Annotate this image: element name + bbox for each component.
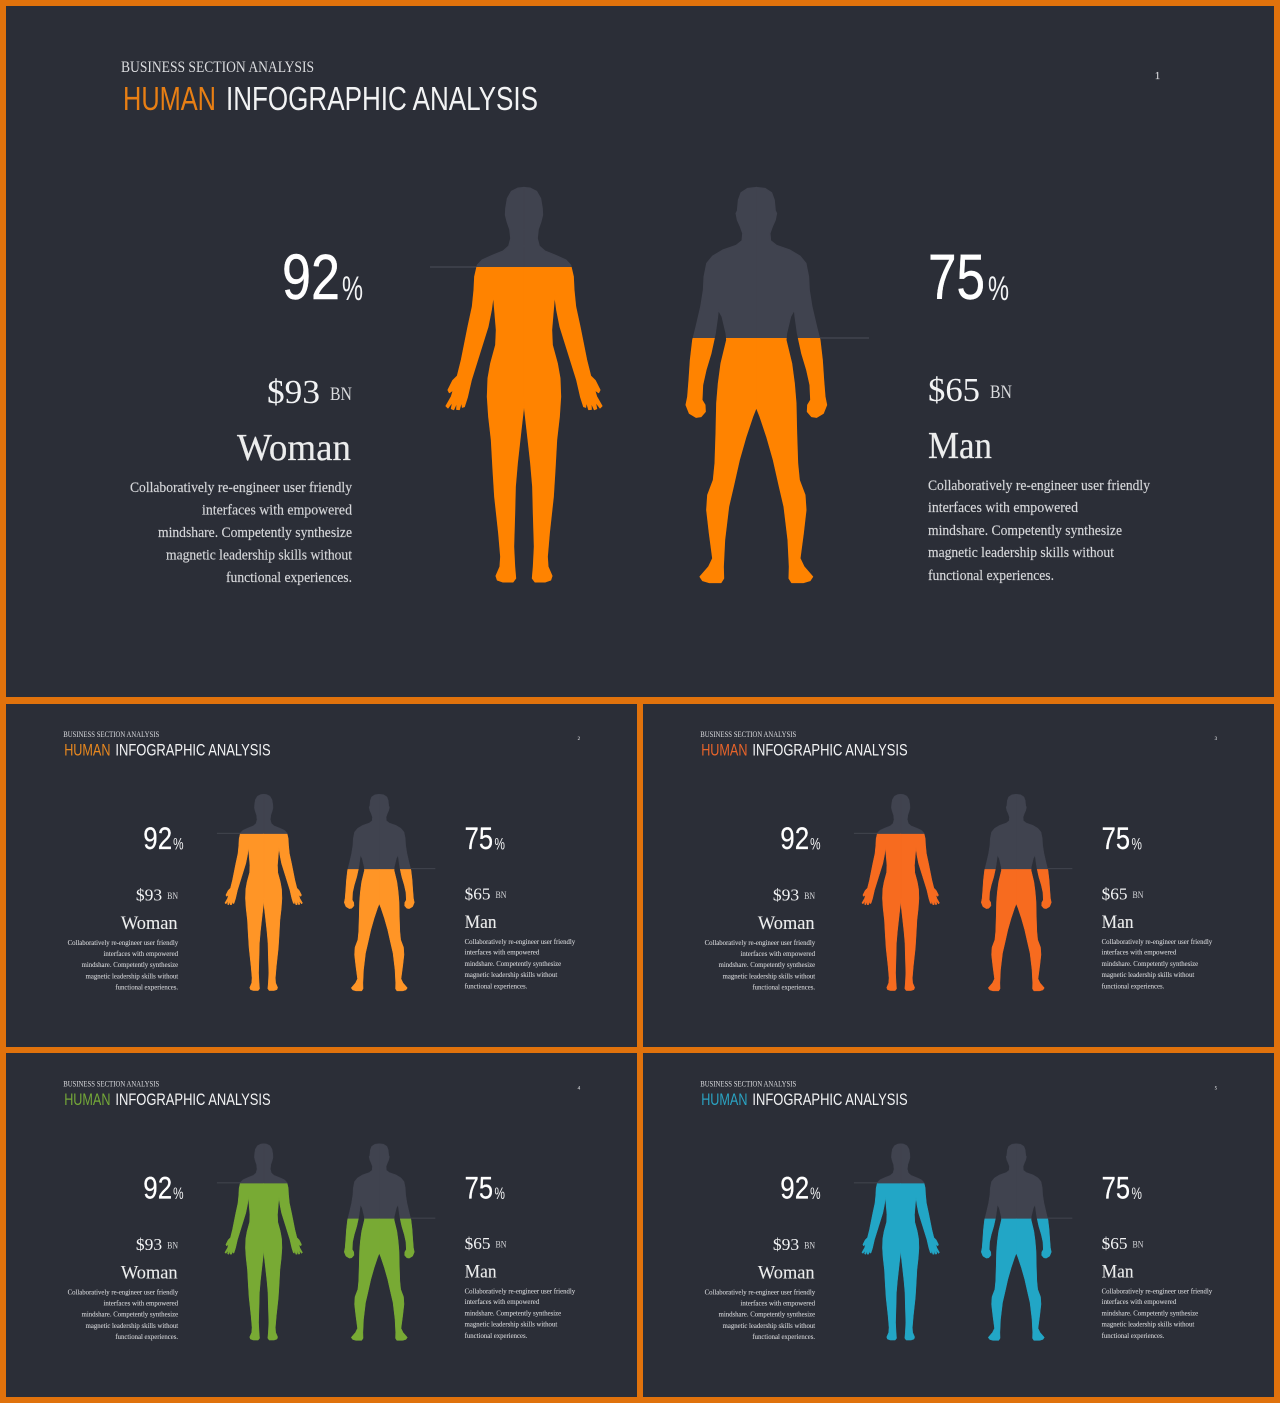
page number: 3 [1215, 737, 1218, 742]
woman description: functional experiences. [115, 1332, 178, 1341]
man description: mindshare. Competently synthesize [1102, 1309, 1199, 1318]
title: HUMAN [701, 1091, 747, 1109]
woman leader line [854, 1181, 878, 1184]
section label: BUSINESS SECTION ANALYSIS [63, 730, 159, 739]
woman heading: Woman [121, 1262, 178, 1283]
woman description: mindshare. Competently synthesize [719, 960, 816, 969]
woman value: BN [804, 1242, 815, 1252]
page number: 5 [1215, 1086, 1218, 1091]
man leader line [411, 1217, 435, 1220]
man percentage: % [495, 1184, 505, 1203]
man heading: Man [1102, 912, 1134, 933]
woman description: magnetic leadership skills without [86, 971, 179, 980]
man figure [344, 794, 414, 991]
woman leader line [430, 266, 478, 268]
title [701, 1091, 908, 1109]
man percentage: % [988, 270, 1009, 308]
man description: interfaces with empowered [928, 500, 1078, 516]
woman value: BN [330, 384, 352, 405]
man heading: Man [465, 912, 497, 933]
man leader line [411, 867, 435, 870]
man description: magnetic leadership skills without [1102, 970, 1195, 979]
man description: functional experiences. [465, 982, 527, 991]
man value: BN [496, 891, 507, 901]
title: HUMAN [64, 742, 110, 760]
man leader line [820, 338, 869, 339]
man description: Collaboratively re-engineer user friendly [928, 478, 1150, 494]
woman value: $93 [773, 885, 799, 904]
man value: $65 [465, 1234, 491, 1253]
woman description: mindshare. Competently synthesize [82, 960, 179, 969]
page number: 2 [578, 737, 581, 742]
man heading: Man [465, 1261, 497, 1282]
man percentage: 75 [465, 820, 493, 856]
title: INFOGRAPHIC ANALYSIS [752, 742, 908, 760]
man description: Collaboratively re-engineer user friendly [1102, 937, 1212, 946]
man leader line [1048, 1217, 1072, 1220]
panel: amber variant [6, 704, 637, 1047]
man description [1102, 937, 1212, 991]
woman percentage: % [342, 270, 363, 308]
man heading: Man [1102, 1261, 1134, 1282]
woman value [773, 1235, 815, 1254]
man percentage: 75 [928, 241, 985, 313]
man description: mindshare. Competently synthesize [465, 1309, 562, 1318]
woman description: mindshare. Competently synthesize [719, 1310, 816, 1319]
title: INFOGRAPHIC ANALYSIS [115, 742, 271, 760]
title [123, 80, 538, 117]
man heading: Man [928, 425, 992, 467]
woman description: magnetic leadership skills without [166, 548, 353, 564]
man description: Collaboratively re-engineer user friendly [1102, 1286, 1212, 1295]
panel: blue variant [643, 1053, 1274, 1397]
man description: magnetic leadership skills without [465, 1320, 558, 1329]
man figure [981, 794, 1051, 991]
woman description: interfaces with empowered [103, 1298, 178, 1307]
woman description [705, 938, 816, 992]
woman description: Collaboratively re-engineer user friendly [705, 938, 815, 947]
panel: red-orange variant [643, 704, 1274, 1047]
woman description [705, 1287, 816, 1341]
man value [1102, 885, 1144, 904]
title [64, 742, 271, 760]
man description: functional experiences. [1102, 1331, 1164, 1340]
woman leader line [217, 832, 241, 835]
man percentage: % [1132, 834, 1142, 853]
woman figure [446, 187, 602, 582]
woman heading: Woman [758, 1262, 815, 1283]
woman percentage: 92 [143, 820, 172, 856]
man percentage: 75 [1102, 1169, 1130, 1205]
woman figure [862, 1144, 939, 1340]
man description: mindshare. Competently synthesize [928, 523, 1122, 539]
title [64, 1091, 271, 1109]
title: HUMAN [123, 80, 216, 117]
woman heading: Woman [758, 913, 815, 934]
woman description: interfaces with empowered [740, 1298, 815, 1307]
woman value [267, 374, 352, 411]
woman description: mindshare. Competently synthesize [158, 525, 352, 541]
man description: interfaces with empowered [465, 1297, 540, 1306]
woman description: Collaboratively re-engineer user friendly [705, 1287, 815, 1296]
woman description: Collaboratively re-engineer user friendly [130, 480, 352, 496]
panel: green variant [6, 1053, 637, 1397]
section label: BUSINESS SECTION ANALYSIS [63, 1079, 159, 1088]
man description: magnetic leadership skills without [928, 545, 1115, 561]
woman leader line [217, 1181, 241, 1184]
woman percentage: 92 [143, 1169, 172, 1205]
woman description: magnetic leadership skills without [723, 971, 816, 980]
woman description: Collaboratively re-engineer user friendly [68, 1287, 178, 1296]
man description: Collaboratively re-engineer user friendly [465, 937, 575, 946]
man value: $65 [928, 372, 980, 409]
man value [928, 372, 1012, 409]
woman value [773, 885, 815, 904]
man value: $65 [465, 885, 491, 904]
title: INFOGRAPHIC ANALYSIS [115, 1091, 271, 1109]
page number: 1 [1155, 71, 1160, 82]
man description: magnetic leadership skills without [1102, 1320, 1195, 1329]
man description: mindshare. Competently synthesize [465, 959, 562, 968]
man value [465, 885, 507, 904]
section label: BUSINESS SECTION ANALYSIS [700, 1079, 796, 1088]
man description: interfaces with empowered [1102, 1297, 1177, 1306]
woman description: interfaces with empowered [740, 949, 815, 958]
man percentage: % [495, 834, 505, 853]
title: INFOGRAPHIC ANALYSIS [752, 1091, 908, 1109]
man description: functional experiences. [465, 1331, 527, 1340]
man percentage: % [1132, 1184, 1142, 1203]
woman description: magnetic leadership skills without [723, 1321, 816, 1330]
man figure [686, 187, 827, 583]
woman description: magnetic leadership skills without [86, 1321, 179, 1330]
woman value: $93 [267, 374, 320, 411]
section label: BUSINESS SECTION ANALYSIS [121, 59, 314, 76]
woman leader line [854, 832, 878, 835]
man value: BN [496, 1241, 507, 1251]
woman description [68, 938, 179, 992]
title: HUMAN [64, 1091, 110, 1109]
woman percentage: % [173, 1184, 184, 1203]
woman figure [862, 794, 939, 991]
woman heading: Woman [237, 427, 351, 469]
man figure [981, 1144, 1051, 1340]
man value [465, 1234, 507, 1253]
woman description: Collaboratively re-engineer user friendly [68, 938, 178, 947]
man description: magnetic leadership skills without [465, 970, 558, 979]
man percentage: 75 [1102, 820, 1130, 856]
woman figure [225, 794, 302, 991]
woman value [136, 885, 178, 904]
section label: BUSINESS SECTION ANALYSIS [700, 730, 796, 739]
woman percentage: 92 [780, 820, 809, 856]
woman description: interfaces with empowered [103, 949, 178, 958]
man value: BN [1133, 891, 1144, 901]
woman description: functional experiences. [752, 983, 815, 992]
man description [1102, 1286, 1212, 1340]
man description: interfaces with empowered [465, 948, 540, 957]
man description [465, 937, 575, 991]
man value [1102, 1234, 1144, 1253]
woman value [136, 1235, 178, 1254]
woman description: interfaces with empowered [202, 502, 352, 518]
title: HUMAN [701, 742, 747, 760]
man value: $65 [1102, 885, 1128, 904]
woman value: $93 [136, 1235, 162, 1254]
man value: BN [1133, 1241, 1144, 1251]
woman percentage: 92 [282, 241, 340, 313]
man description: mindshare. Competently synthesize [1102, 959, 1199, 968]
man description: functional experiences. [1102, 982, 1164, 991]
woman description: functional experiences. [226, 570, 352, 586]
title: INFOGRAPHIC ANALYSIS [226, 80, 538, 117]
woman percentage: % [810, 834, 821, 853]
man value: $65 [1102, 1234, 1128, 1253]
man description: Collaboratively re-engineer user friendly [465, 1286, 575, 1295]
page number: 4 [578, 1086, 581, 1091]
man figure [344, 1144, 414, 1340]
man description: functional experiences. [928, 568, 1054, 584]
panel: main slide [6, 6, 1274, 697]
woman value: BN [804, 892, 815, 902]
woman description: functional experiences. [115, 983, 178, 992]
man value: BN [990, 382, 1012, 403]
woman description [68, 1287, 179, 1341]
woman figure [225, 1144, 302, 1340]
man description [928, 478, 1150, 584]
woman percentage: % [810, 1184, 821, 1203]
title [701, 742, 908, 760]
woman description: functional experiences. [752, 1332, 815, 1341]
man percentage: 75 [465, 1169, 493, 1205]
woman value: BN [167, 892, 178, 902]
woman value: $93 [773, 1235, 799, 1254]
woman percentage: 92 [780, 1169, 809, 1205]
woman heading: Woman [121, 913, 178, 934]
man description [465, 1286, 575, 1340]
woman description: mindshare. Competently synthesize [82, 1310, 179, 1319]
woman value: $93 [136, 885, 162, 904]
man description: interfaces with empowered [1102, 948, 1177, 957]
woman percentage: % [173, 834, 184, 853]
man leader line [1048, 867, 1072, 870]
woman value: BN [167, 1242, 178, 1252]
woman description [130, 480, 353, 586]
